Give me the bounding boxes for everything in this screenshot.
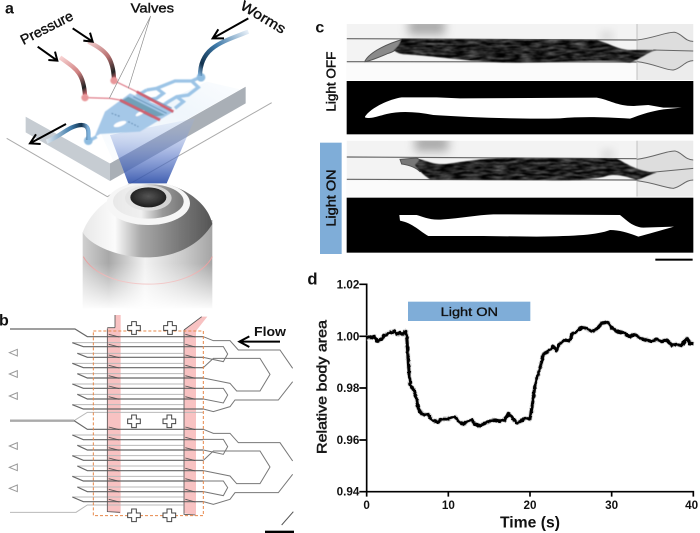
axes <box>359 284 693 497</box>
x tick labels: 30 <box>605 499 618 512</box>
label a: a <box>5 0 14 17</box>
network bottom <box>203 429 293 504</box>
slab right side face <box>110 87 246 181</box>
slab left side face <box>26 117 110 181</box>
brightfield Light OFF <box>347 18 693 80</box>
scale bar <box>265 531 294 533</box>
x tick labels: 10 <box>442 499 455 512</box>
mask Light ON <box>347 198 693 253</box>
y tick labels: 0.96 <box>337 434 360 447</box>
panel a: microfluidic chip on objective <box>5 0 289 310</box>
slab translucent highlight <box>100 82 240 161</box>
y tick labels <box>337 278 360 499</box>
alignment crosses <box>128 322 176 522</box>
label Pressure: Pressure <box>17 7 76 48</box>
network top <box>203 337 293 412</box>
corner channel <box>282 512 293 525</box>
microscope objective <box>47 182 217 310</box>
data line <box>367 322 694 426</box>
error band <box>367 322 694 426</box>
y tick labels: 0.98 <box>337 382 360 395</box>
orange dashed region <box>93 331 203 516</box>
scale bar c <box>655 259 693 261</box>
dark channels <box>10 329 203 502</box>
arrows <box>30 18 248 144</box>
tube: pressure 2 <box>88 42 114 80</box>
x tick labels: 20 <box>524 499 536 512</box>
tube: worms <box>200 32 248 76</box>
Light ON bar <box>408 302 530 321</box>
tube: pressure 1 <box>60 57 85 95</box>
tube: outlet <box>47 125 88 142</box>
panel b: device micrograph <box>0 313 294 533</box>
x tick labels <box>363 499 698 512</box>
flow arrow <box>239 336 280 347</box>
label Light OFF: Light OFF <box>323 52 338 112</box>
label Valves: Valves <box>131 1 174 16</box>
label Light ON: Light ON <box>323 169 338 227</box>
x tick labels: 0 <box>363 499 370 512</box>
y tick labels: 0.94 <box>337 486 360 499</box>
valve right <box>184 317 207 515</box>
label c: c <box>315 19 324 36</box>
slab top <box>26 40 246 163</box>
label Flow: Flow <box>254 325 286 339</box>
valve pointer lines <box>109 16 151 98</box>
y axis title: Relative body area <box>314 320 330 454</box>
blue channel network <box>84 73 205 145</box>
triangle markers <box>9 349 17 492</box>
label d: d <box>307 269 318 288</box>
Light ON band <box>320 143 342 254</box>
x axis title: Time (s) <box>500 515 560 532</box>
y tick labels: 1.00 <box>337 330 359 343</box>
panel d: relative body area chart <box>307 269 698 532</box>
brightfield Light ON <box>347 135 693 197</box>
Light ON label: Light ON <box>441 305 498 319</box>
glass plate outline <box>7 103 272 197</box>
light cone <box>110 118 195 183</box>
red valves <box>81 77 173 120</box>
inlet double line <box>10 417 74 424</box>
valve edges and crossing marks <box>107 315 202 515</box>
panel c: worm images <box>315 18 693 261</box>
valve left <box>107 315 121 513</box>
light channels <box>10 343 203 512</box>
y tick labels: 1.02 <box>337 278 360 291</box>
x tick labels: 40 <box>685 499 698 512</box>
mask Light OFF <box>347 81 693 134</box>
